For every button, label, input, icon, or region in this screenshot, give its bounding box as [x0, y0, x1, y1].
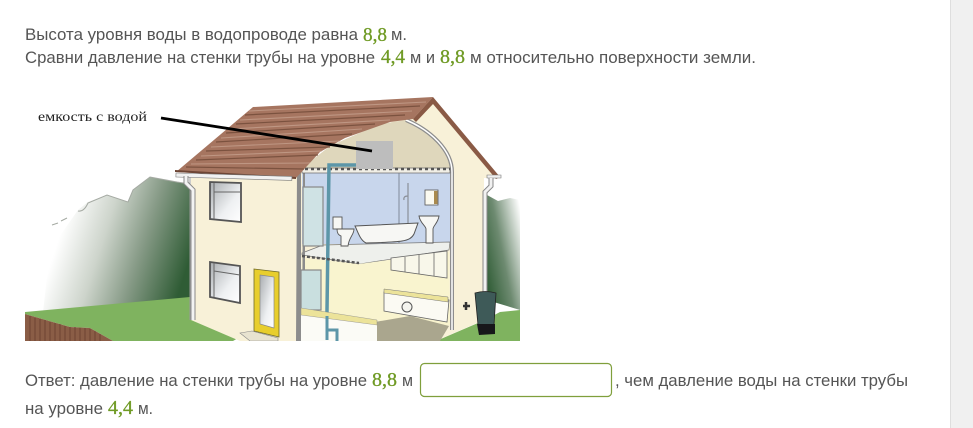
- upper window: [210, 182, 241, 222]
- answer text: [25, 369, 908, 419]
- question text: 8,8: [440, 46, 465, 68]
- question text: Высота уровня воды в водопроводе равна: [25, 26, 359, 44]
- question text: м относительно поверхности земли.: [470, 49, 756, 67]
- ground floor door: [301, 270, 321, 310]
- blue water pipe: [327, 165, 356, 340]
- room divider: [398, 173, 400, 243]
- answer text: м.: [138, 400, 153, 418]
- house walls: [191, 100, 497, 341]
- gable roof edge: [413, 97, 500, 179]
- question text: 8,8: [363, 24, 387, 46]
- cut wall section: [296, 172, 305, 341]
- water butt: [475, 292, 496, 335]
- answer text: Ответ: давление на стенки трубы на уровне: [25, 372, 367, 390]
- answer text: 4,4: [108, 397, 133, 419]
- bath: [355, 223, 418, 243]
- downpipe left: [186, 176, 193, 320]
- question text: м и: [410, 49, 435, 67]
- kitchen unit with washer: [384, 289, 449, 322]
- lawn left: [25, 297, 240, 341]
- answer text: , чем давление воды на стенки трубы: [615, 372, 908, 390]
- grey water tank: [356, 141, 393, 169]
- outdoor tap: [463, 302, 470, 310]
- downpipe right: [485, 178, 491, 300]
- white bottom edge mask: [25, 341, 521, 343]
- question text: 4,4: [381, 46, 405, 68]
- answer text: 8,8: [372, 369, 397, 391]
- arrow line to tank: [161, 118, 372, 151]
- ceiling beam: [302, 168, 450, 173]
- upstairs floor slab beams: [302, 256, 359, 263]
- shower: [404, 183, 408, 226]
- left eave: [175, 170, 296, 179]
- question text: м.: [391, 26, 407, 44]
- answer text: на уровне: [25, 400, 103, 418]
- bathroom room: [302, 172, 450, 244]
- lower window: [210, 262, 240, 303]
- left wall edge: [189, 177, 191, 320]
- yellow door: [254, 269, 279, 337]
- pipe under sink: [327, 316, 337, 341]
- bathroom floor: [302, 242, 450, 264]
- fence: [25, 314, 113, 341]
- door step: [240, 331, 278, 341]
- main roof: [176, 97, 433, 178]
- bathroom mirror: [425, 190, 438, 205]
- kitchen wall units: [391, 251, 447, 278]
- answer text: м: [402, 372, 413, 390]
- bushes background left: [43, 177, 190, 312]
- answer input box: [420, 364, 612, 396]
- tank label: емкость с водой: [38, 109, 147, 124]
- question text: Сравни давление на стенки трубы на уровне: [25, 49, 375, 67]
- kitchen floor: [360, 316, 449, 341]
- question text: [25, 24, 756, 68]
- bush outline: [52, 177, 190, 225]
- sink counter: [301, 308, 377, 341]
- toilet: [333, 217, 354, 246]
- lawn right: [436, 310, 520, 341]
- house illustration: [25, 97, 521, 343]
- roof light stripes: [191, 102, 426, 164]
- ground floor room: [302, 252, 450, 341]
- sidebar: [950, 0, 973, 428]
- basin: [419, 216, 439, 243]
- attic interior: [302, 120, 452, 168]
- gutter right eave: [487, 175, 501, 178]
- bushes background right: [487, 195, 520, 310]
- upstairs door: [303, 187, 323, 246]
